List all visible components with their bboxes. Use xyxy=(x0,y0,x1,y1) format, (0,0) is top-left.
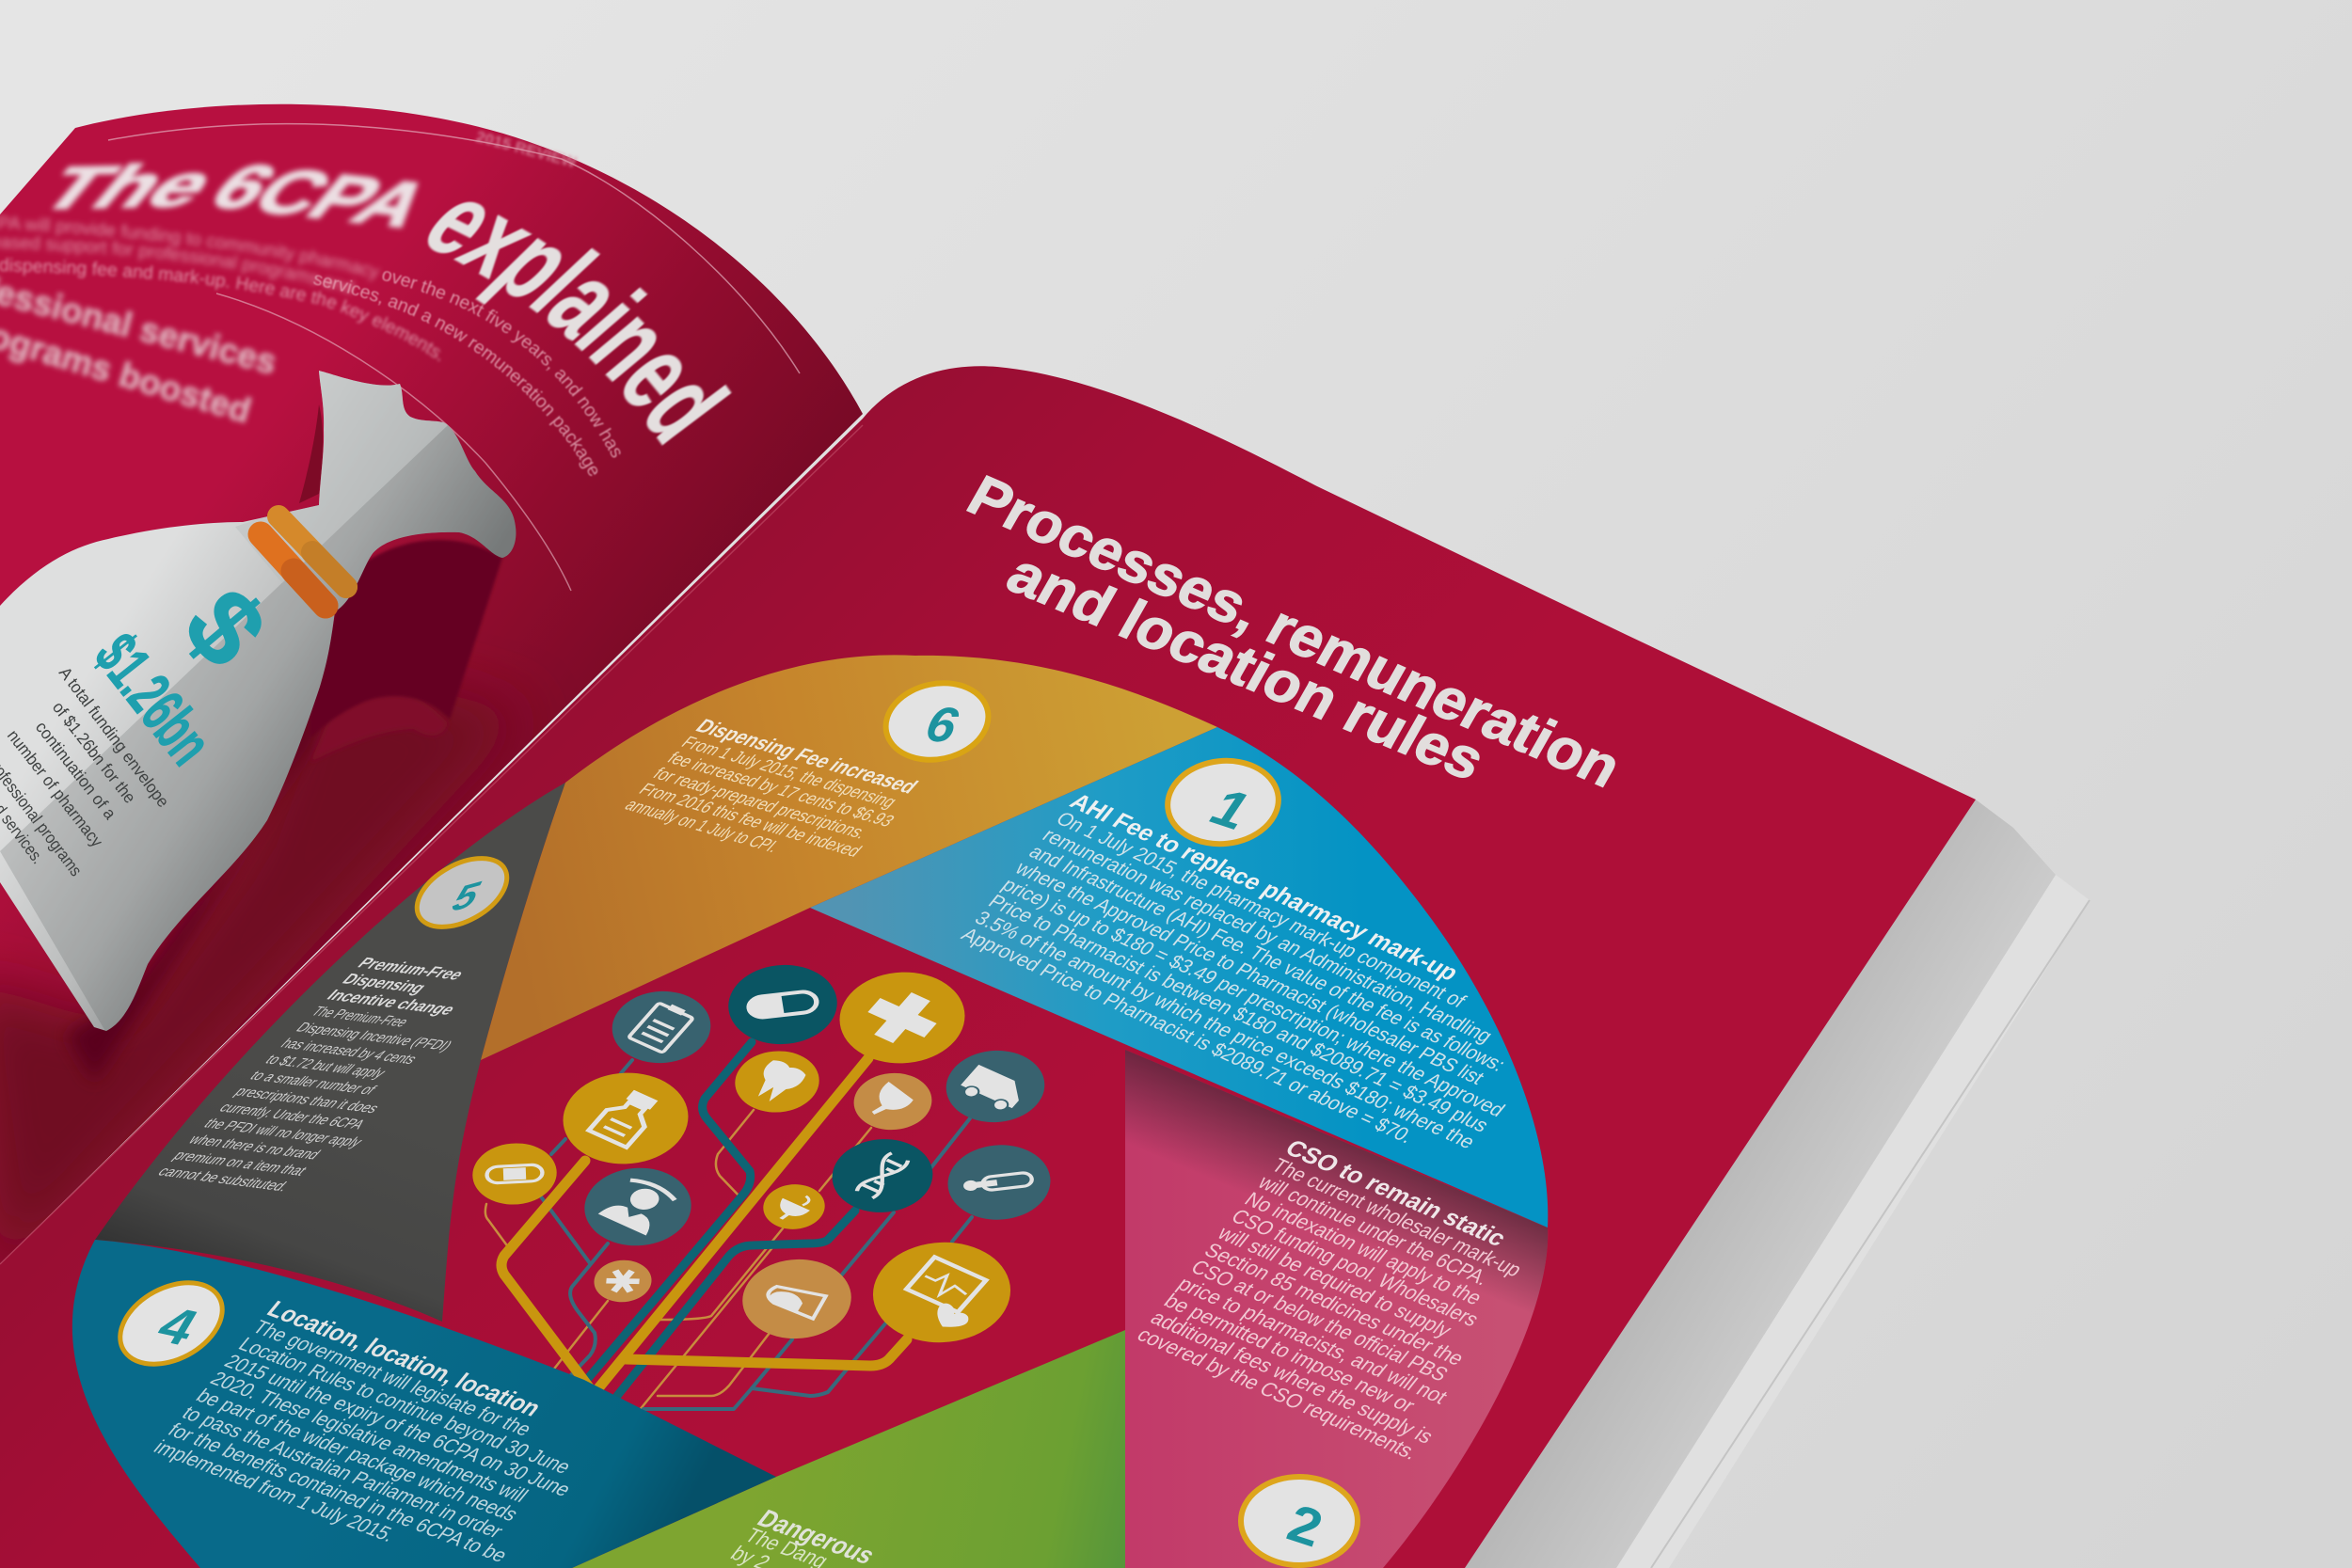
text: segment 2 copy: will continue under the 6CPA. xyxy=(1253,1171,1494,1290)
icon: clipboard xyxy=(594,978,729,1076)
icon: heart monitor xyxy=(847,1224,1037,1361)
text: segment 6 copy: From 2016 this fee will be indexed xyxy=(635,779,866,860)
icon: orange tie band xyxy=(261,516,346,606)
panel: segment 5 premium-free xyxy=(95,783,565,1322)
text: segment 1 copy: and Infrastructure (AHI) Fee. The value of the fee is as follows: xyxy=(1025,841,1510,1076)
text: intro paragraph xyxy=(0,213,621,508)
panel: page block edge xyxy=(1465,800,2090,1568)
icon: bandage xyxy=(456,1132,573,1216)
icon: thermometer xyxy=(928,1131,1071,1234)
text: segment 5 copy: currently. Under the 6CPA xyxy=(215,1100,369,1132)
text: segment 4 copy: to pass the Australian Parliament in order xyxy=(177,1402,508,1543)
heading: The 6CPA explained: The xyxy=(23,151,235,222)
text: segment 5 copy: premium on a item that xyxy=(169,1148,310,1179)
figure: $1.26bn: $1.26bn xyxy=(81,621,226,778)
text: segment 4 copy xyxy=(149,1297,620,1568)
panel: right page xyxy=(0,366,1976,1568)
heading: segment 1: AHI Fee to replace pharmacy mark-up xyxy=(1064,789,1463,986)
badge: 4: 4 xyxy=(151,1295,201,1357)
icon: DNA helix xyxy=(813,1126,952,1226)
badge: 1 xyxy=(1164,755,1282,849)
text: segment 1 copy: price) is up to $180 = $3.49 per prescription; where the Approved xyxy=(997,875,1509,1121)
text: segment 1 copy: On 1 July 2015, the pharmacy mark-up component of xyxy=(1052,808,1470,1012)
heading: segment 4: Location, location, location xyxy=(262,1297,546,1421)
text: segment 2 copy: CSO at or below the official PBS xyxy=(1186,1256,1453,1386)
icon: mortar cup xyxy=(839,1063,946,1140)
text: segment 1 copy: Price to Pharmacist is between $180 and $2089.71 = $3.49 plus xyxy=(984,891,1493,1136)
text: segment 5 copy: has increased by 4 cents xyxy=(277,1036,421,1068)
text: intro paragraph: over the next five years, and now has xyxy=(382,270,621,459)
text: running header: 2015 REVIEW xyxy=(474,128,580,171)
heading: Processes, remuneration and location rules: Processes, remuneration xyxy=(957,464,1631,800)
text: segment 2 copy: CSO funding pool. Wholesalers xyxy=(1227,1205,1484,1331)
panel: left page xyxy=(0,103,863,1264)
text: segment 6 copy: From 1 July 2015, the dispensing xyxy=(677,732,902,811)
text: segment 4 copy: 2015 until the expiry of the 6CPA on 30 June xyxy=(219,1351,576,1500)
text: funding envelope note: of $1.26bn for the xyxy=(49,698,139,807)
text: segment 6 copy: for ready-prepared prescriptions. xyxy=(649,764,873,842)
icon: pill xyxy=(707,950,858,1059)
text: segment 1 copy: Approved Price to Pharmacist is $2089.71 or above = $70. xyxy=(957,924,1418,1148)
chart: icon tree connector lines xyxy=(485,1042,972,1411)
badge: 5 xyxy=(405,845,518,941)
text: segment 1 copy xyxy=(956,789,1579,1171)
text: segment 5 copy xyxy=(153,955,522,1198)
icon: nurse xyxy=(564,1153,712,1260)
text: segment 6 copy xyxy=(621,715,930,878)
panel: segment 2 CSO xyxy=(1125,1050,1574,1568)
icon: medical cross xyxy=(816,956,989,1080)
text: segment 5 copy: to a smaller number of xyxy=(246,1068,380,1098)
text: segment 5 copy: Premium-Free xyxy=(354,955,469,983)
icon: medicine bottle xyxy=(539,1056,712,1180)
text: segment 1 copy: 3.5% of the amount by which the price exceeds $180; where the xyxy=(970,908,1479,1153)
money bag shadows xyxy=(66,404,502,1082)
icon: ambulance xyxy=(928,1037,1063,1135)
text: segment 5 copy: Dispensing xyxy=(338,971,431,996)
text: segment 2 copy: additional fees where the supply is xyxy=(1146,1307,1438,1448)
text: segment 2 copy: Section 85 medicines under the xyxy=(1200,1239,1469,1370)
text: segment 2 copy: price to pharmacists, and will not xyxy=(1173,1273,1452,1408)
text: segment 2 copy: No indexation will apply to the xyxy=(1240,1188,1486,1309)
chart: pie segments and icon badges xyxy=(72,655,1579,1568)
text: segment 2 copy: be permitted to impose new or xyxy=(1159,1290,1420,1417)
text: segment 1 copy: remuneration was replaced by an Administration, Handling xyxy=(1038,825,1497,1047)
text: segment 2 copy: The current wholesaler mark-up xyxy=(1267,1154,1526,1281)
badge: 2 xyxy=(1241,1477,1358,1565)
text: segment 5 copy: Incentive change xyxy=(323,987,460,1018)
icon: asterisk xyxy=(583,1252,662,1310)
text: segment 4 copy: 2020. These legislative amendments will xyxy=(205,1368,532,1507)
text: segment 5 copy: Dispensing Incentive (PFDI) xyxy=(293,1020,455,1053)
text: funding envelope note xyxy=(0,663,173,879)
heading: The 6CPA explained: 6CPA xyxy=(194,151,448,240)
text: segment 4 copy: The government will legislate for the xyxy=(247,1317,536,1440)
heading: The 6CPA explained: explained xyxy=(426,200,733,446)
text: segment 4 copy: implemented from 1 July 2015. xyxy=(149,1436,401,1546)
text: segment 5 copy: prescriptions than it does xyxy=(230,1084,383,1117)
heading: segment 2: CSO to remain static xyxy=(1279,1135,1511,1252)
icon: tooth xyxy=(719,1039,835,1124)
panel: segment 3 dangerous drugs xyxy=(572,1330,1125,1568)
text: segment 5 copy: cannot be substituted. xyxy=(154,1164,294,1195)
spine crease line xyxy=(0,425,863,1264)
text: segment 4 copy: be part of the wider package which needs xyxy=(191,1386,522,1526)
icon: dollar sign: $ xyxy=(162,567,289,688)
badge: 2: 2 xyxy=(1280,1494,1329,1559)
text: segment 4 copy: Location Rules to continue beyond 30 June xyxy=(233,1334,576,1478)
badge: 6 xyxy=(879,673,995,769)
text: segment 5 copy: the PFDI will no longer apply xyxy=(200,1116,367,1150)
badge: 1: 1 xyxy=(1203,777,1256,842)
text: segment 2 copy: covered by the CSO requirements. xyxy=(1133,1323,1422,1464)
text: segment 5 copy: The Premium-Free xyxy=(308,1004,412,1030)
badge: 6: 6 xyxy=(920,696,964,754)
icon: capsule xyxy=(722,1244,872,1354)
text: segment 5 copy: to $1.72 but will apply xyxy=(262,1052,390,1081)
panel: segment 4 location rules xyxy=(72,1240,776,1568)
badge: 5: 5 xyxy=(448,874,485,920)
text: segment 4 copy: for the benefits contained in the 6CPA to be xyxy=(163,1419,512,1566)
heading: The 6CPA explained xyxy=(23,151,733,508)
heading: segment 6: Dispensing Fee increased xyxy=(691,715,923,798)
text: segment 6 copy: annually on 1 July to CPI. xyxy=(621,795,785,856)
icon: bowl of hygieia xyxy=(752,1176,836,1238)
badge: 4 xyxy=(106,1266,236,1381)
text: segment 5 copy: when there is no brand xyxy=(183,1132,324,1163)
text: segment 2 copy: will still be required to supply xyxy=(1213,1222,1456,1341)
text: intro paragraph: services, and a new remuneration package xyxy=(312,275,598,477)
text: funding envelope note: A total funding envelope xyxy=(56,663,173,811)
text: segment 2 copy xyxy=(1132,1135,1574,1465)
heading: Processes, remuneration and location rules: and location rules xyxy=(996,542,1496,793)
text: funding envelope note: continuation of a xyxy=(32,718,120,823)
panel: segment 6 dispensing fee xyxy=(481,655,1217,1060)
panel: segment 1 AHI fee xyxy=(810,727,1579,1227)
text: segment 6 copy: fee increased by 17 cents to $6.93 xyxy=(663,748,899,831)
text: segment 1 copy: where the Approved Price to Pharmacist (wholesaler PBS list xyxy=(1010,858,1488,1089)
icon: money bag xyxy=(0,371,516,1031)
text: funding envelope note: number of pharmacy xyxy=(4,726,106,850)
heading: segment 3: Dangerous xyxy=(752,1504,882,1568)
